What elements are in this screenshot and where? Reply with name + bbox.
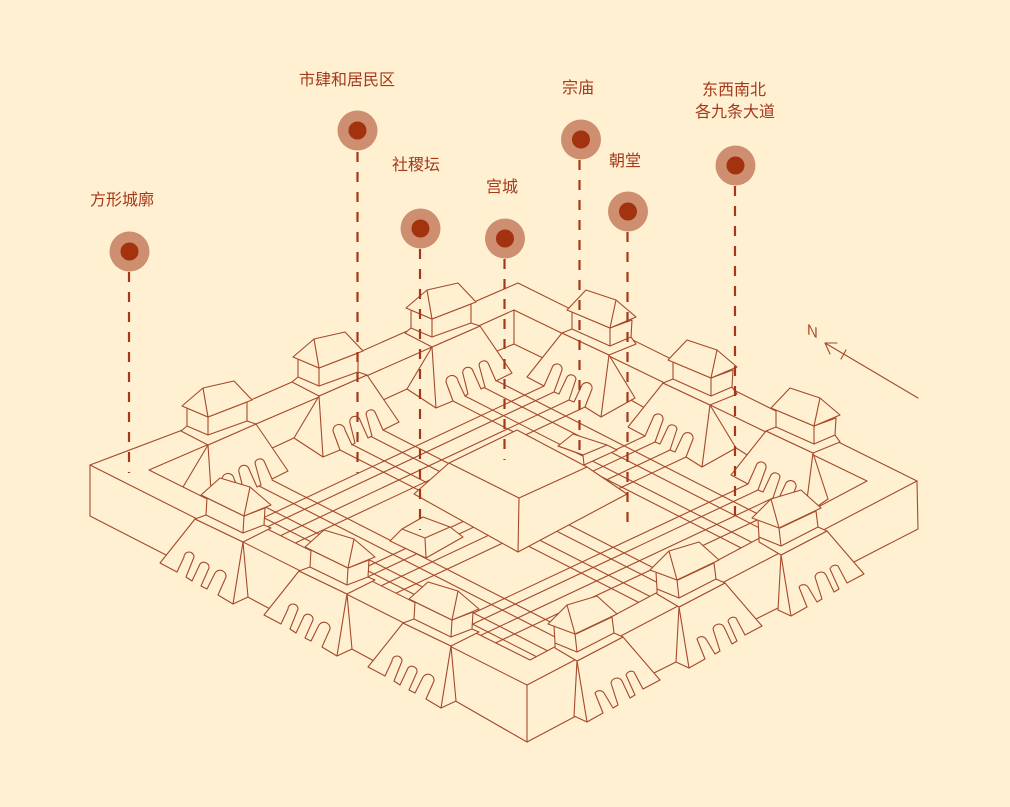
- callout: ancestral temple: [561, 79, 601, 451]
- altar of soil and grain: [390, 517, 463, 558]
- callout: nine avenues each way: [695, 81, 775, 516]
- callout: palace city: [485, 178, 525, 460]
- wall top and outer faces: [90, 465, 918, 742]
- compass arrow: N: [807, 322, 818, 342]
- callout: court hall: 朝堂: [609, 152, 641, 170]
- palace city platform: [414, 430, 627, 552]
- compass arrow: [807, 322, 918, 398]
- callout: nine avenues each way: 各九条大道: [695, 103, 775, 121]
- gate: north-west wall, far: [405, 283, 512, 408]
- gate: south-east wall, south: [548, 596, 660, 722]
- callout: altar of soil and grain: 社稷坛: [392, 156, 440, 174]
- road grid: north-east to south-west avenues: [248, 386, 789, 646]
- gate: north-west wall, middle: [292, 332, 399, 457]
- city wall: back edges and floor: [90, 283, 917, 481]
- callout: square city wall: 方形城廓: [90, 191, 154, 209]
- callout: altar of soil and grain: [392, 156, 440, 530]
- callout: nine avenues each way: 东西南北: [702, 81, 766, 99]
- gate: south-west wall, west: [160, 478, 271, 604]
- gate: south-east wall, east: [752, 490, 864, 616]
- gate: south-west wall, south: [368, 582, 479, 708]
- gate: south-west wall, middle: [264, 530, 375, 656]
- gate: north-east wall, middle: [628, 340, 737, 467]
- gate: south-east wall, middle: [650, 542, 762, 668]
- road grid: north-west to south-east avenues: [229, 381, 795, 659]
- callout: markets and residences: [299, 71, 395, 473]
- court hall platform: [558, 434, 617, 465]
- callout: markets and residences: 市肆和居民区: [299, 71, 395, 89]
- callout: ancestral temple: 宗庙: [562, 79, 594, 97]
- callout: square city wall: [90, 191, 154, 473]
- gate: north-east wall, far: [527, 290, 636, 417]
- gate: north-east wall, near: [731, 388, 840, 515]
- callout: court hall: [608, 152, 648, 522]
- gate: north-west wall, near: [181, 381, 288, 506]
- callout: palace city: 宫城: [486, 178, 518, 196]
